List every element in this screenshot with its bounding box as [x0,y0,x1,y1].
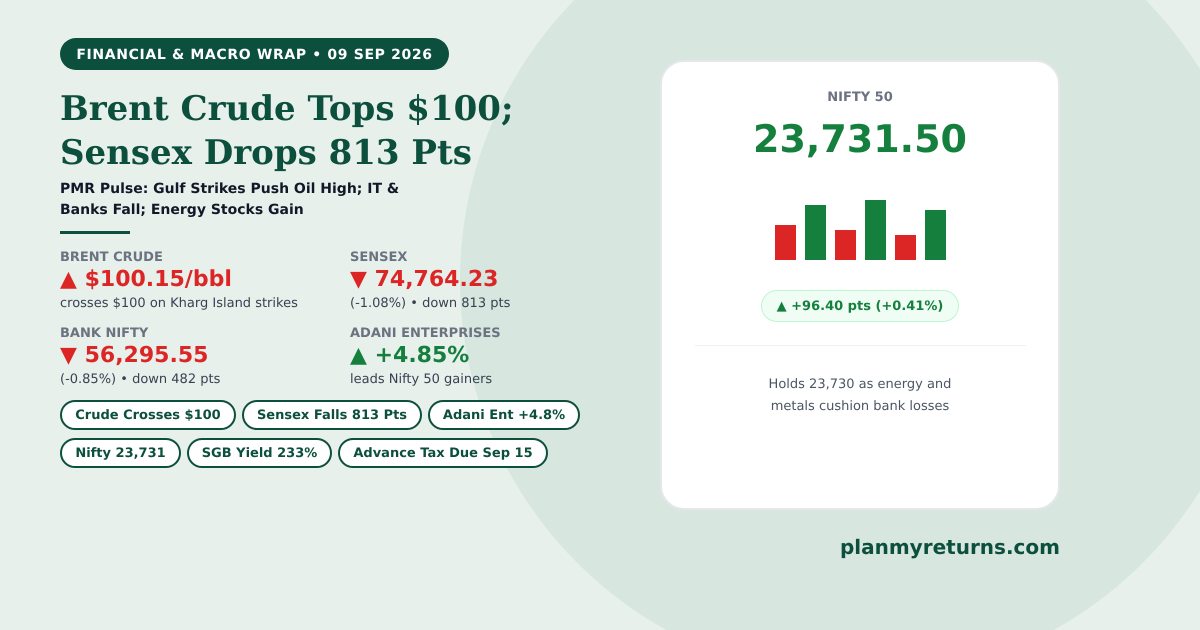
chip: adani [428,400,580,430]
stat: adani enterprises [350,326,501,387]
card note [769,377,951,414]
chip: sgb yield [187,438,332,468]
stat: bank nifty [60,326,220,387]
stat: sensex [350,250,510,311]
card delta pill: ▲ +96.40 pts (+0.41%) [777,299,943,314]
card value: 23,731.50 [753,117,967,161]
chip: sensex falls [242,400,422,430]
accent rule [60,231,130,234]
badge: date: FINANCIAL & MACRO WRAP • 09 SEP 2026 [76,47,433,63]
card label: NIFTY 50 [827,90,893,105]
stat: bank nifty: (-0.85%) • down 482 pts [60,372,220,387]
bar chart [775,200,946,260]
chip: nifty: Nifty 23,731 [75,446,166,461]
card delta pill [761,290,959,322]
chip: sgb yield: SGB Yield 233% [202,446,317,461]
subtitle: Banks Fall; Energy Stocks Gain [60,202,304,218]
stat: bank nifty: BANK NIFTY [60,326,148,341]
stat: adani enterprises: ▲ +4.85% [350,343,469,368]
stat: adani enterprises: ADANI ENTERPRISES [350,326,501,341]
badge: date [60,38,449,70]
card note: metals cushion bank losses [771,399,949,414]
brand url: planmyreturns.com [840,535,1060,559]
panel: nifty card [660,60,1060,510]
stat: brent crude: BRENT CRUDE [60,250,163,265]
stat: brent crude: crosses $100 on Kharg Island strikes [60,296,298,311]
stat: brent crude [60,250,298,311]
chip: nifty [60,438,181,468]
stat: sensex: SENSEX [350,250,407,265]
chip: advance tax [338,438,548,468]
title [60,89,514,173]
subtitle [60,181,399,218]
title: Brent Crude Tops $100; [60,89,514,129]
stat: sensex: (-1.08%) • down 813 pts [350,296,510,311]
chip: sensex falls: Sensex Falls 813 Pts [257,408,407,423]
title: Sensex Drops 813 Pts [60,133,472,173]
card note: Holds 23,730 as energy and [769,377,951,392]
chip: crude crosses [60,400,236,430]
chip: advance tax: Advance Tax Due Sep 15 [353,446,533,461]
chip: adani: Adani Ent +4.8% [443,408,565,423]
stat: bank nifty: ▼ 56,295.55 [60,343,208,368]
stat: adani enterprises: leads Nifty 50 gainers [350,372,492,387]
chip: crude crosses: Crude Crosses $100 [75,408,221,423]
subtitle: PMR Pulse: Gulf Strikes Push Oil High; IT & [60,181,399,197]
stat: brent crude: ▲ $100.15/bbl [60,267,232,292]
stat: sensex: ▼ 74,764.23 [350,267,498,292]
